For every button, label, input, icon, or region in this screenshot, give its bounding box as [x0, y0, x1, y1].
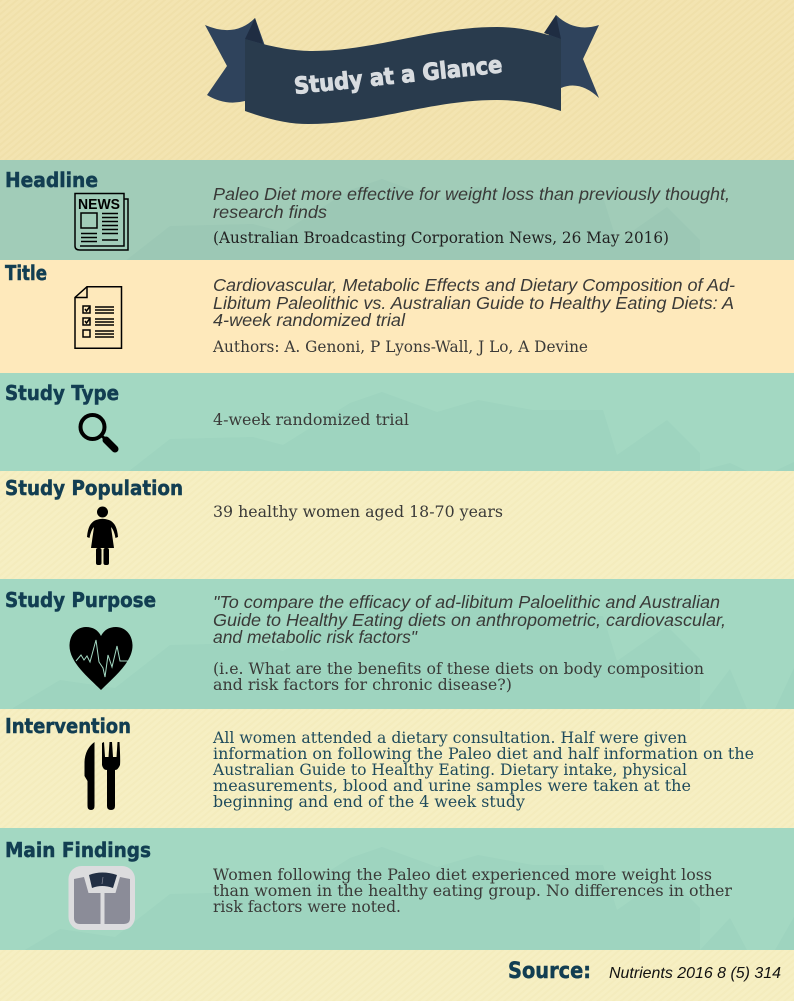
text: headline quote: (Australian Broadcasting Corporation News, 26 May 2016) — [213, 229, 669, 247]
icon: woman — [87, 506, 118, 565]
text: intervention: measurements, blood and urine samples were taken at the — [213, 777, 691, 795]
heading: Study Population: Study Population — [5, 476, 183, 500]
text: intervention: Australian Guide to Healthy Eating. Dietary intake, physical — [212, 761, 687, 779]
text: findings: risk factors were noted. — [213, 898, 401, 916]
heading: Main Findings: Main Findings — [5, 838, 151, 862]
icon: newspaper: NEWS — [78, 196, 120, 213]
text: headline quote — [213, 184, 730, 247]
panel: headline — [0, 160, 794, 360]
panel: study type — [0, 373, 794, 573]
text: study title: 4-week randomized trial — [213, 310, 406, 330]
text: headline quote: Paleo Diet more effective for weight loss than previously thought, — [213, 184, 730, 204]
text: intervention — [212, 729, 754, 811]
icon: magnifying glass — [80, 415, 115, 449]
text: intervention: information on following the Paleo diet and half information on the — [213, 745, 754, 763]
text: intervention: All women attended a dietary consultation. Half were given — [212, 729, 687, 747]
text: purpose: (i.e. What are the benefits of these diets on body composition — [213, 660, 704, 678]
text: intervention: beginning and end of the 4 week study — [213, 793, 525, 811]
heading: Study Purpose: Study Purpose — [5, 588, 156, 612]
banner title: Study at a Glance — [293, 52, 503, 100]
text: findings: than women in the healthy eating group. No differences in other — [213, 882, 733, 900]
text: purpose: and risk factors for chronic disease?) — [213, 676, 512, 694]
text: headline quote: research finds — [213, 202, 327, 222]
panel: intervention — [0, 709, 794, 828]
icon: heart with ECG — [69, 627, 138, 690]
heading: Study Type: Study Type — [5, 381, 119, 405]
panel: page header background — [0, 0, 794, 160]
panel: study purpose — [0, 579, 794, 779]
text: findings: Women following the Paleo diet experienced more weight loss — [213, 866, 712, 884]
text: study title: Authors: A. Genoni, P Lyons-Wall, J Lo, A Devine — [212, 338, 588, 356]
heading: Title: Title — [5, 261, 47, 285]
heading: Headline: Headline — [5, 168, 98, 192]
icon: checklist document — [75, 287, 122, 348]
icon: weighing scale — [68, 866, 135, 930]
text: study title: Cardiovascular, Metabolic Effects and Dietary Composition of Ad- — [213, 275, 735, 295]
source label: Source: — [508, 959, 591, 984]
text: purpose: Guide to Healthy Eating diets on anthropometric, cardiovascular, — [213, 610, 726, 630]
banner: Study at a Glance — [205, 15, 599, 124]
source citation: Nutrients 2016 8 (5) 314 — [609, 965, 781, 982]
text: population: 39 healthy women aged 18-70 years — [213, 503, 503, 521]
panel: main findings — [0, 828, 794, 1001]
text: study title — [212, 275, 735, 356]
text: findings — [213, 866, 733, 916]
text: study type: 4-week randomized trial — [213, 411, 409, 429]
text: purpose: "To compare the efficacy of ad-libitum Paloelithic and Australian — [213, 592, 720, 612]
panel: title — [0, 260, 794, 373]
heading: Intervention: Intervention — [5, 714, 131, 738]
text: purpose — [213, 592, 726, 694]
panel: study population — [0, 471, 794, 579]
icon: newspaper — [75, 194, 128, 250]
panel: source footer — [0, 950, 794, 1001]
icon: knife and fork — [84, 742, 120, 810]
text: study title: Libitum Paleolithic vs. Australian Guide to Healthy Eating Diets: A — [213, 293, 734, 313]
text: purpose: and metabolic risk factors" — [213, 627, 418, 647]
